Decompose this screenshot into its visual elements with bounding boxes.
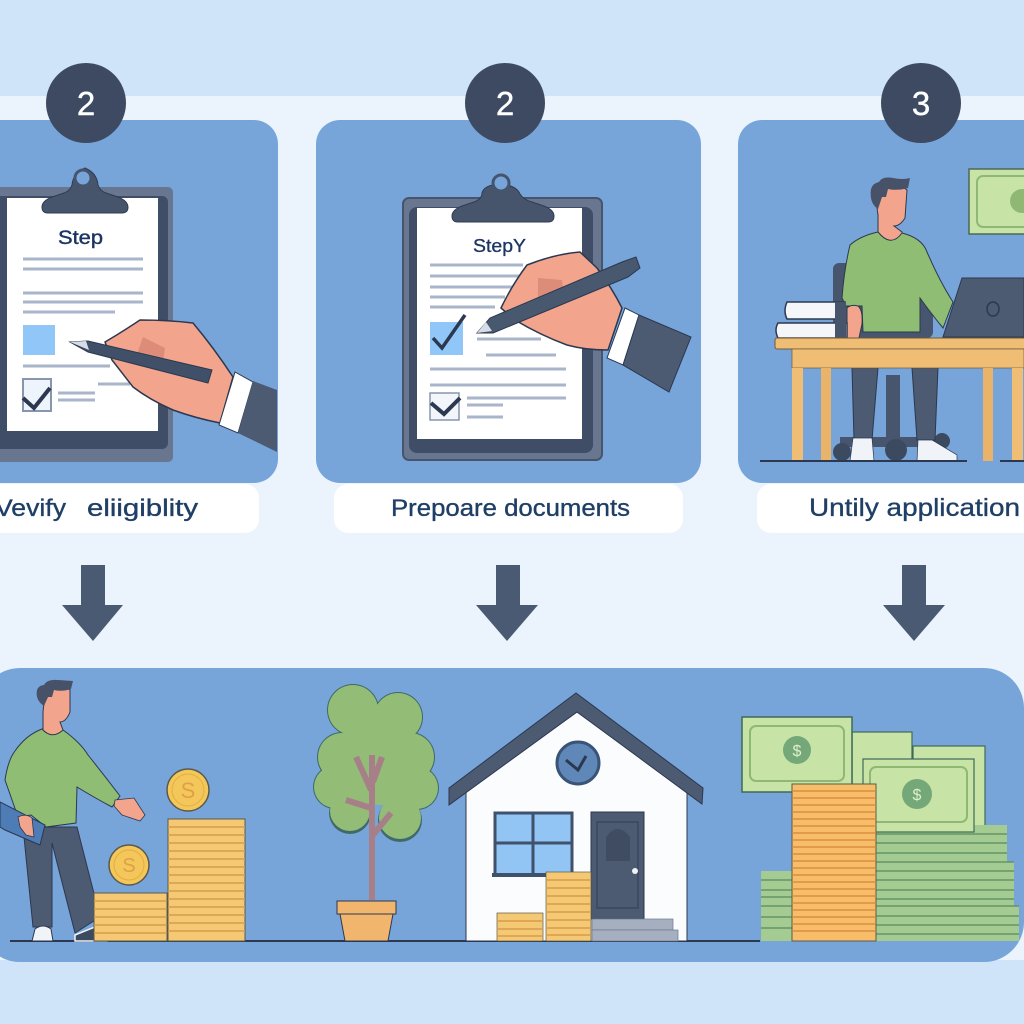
label: verify eligibility: eliigiblity <box>87 495 198 522</box>
panel: step 2 prepare documents <box>316 120 701 483</box>
label: application <box>757 484 1024 533</box>
label: prepare documents: Prepoare documents <box>391 495 630 522</box>
step badge 1: 2 <box>77 85 95 122</box>
coin stacks: S <box>122 855 136 877</box>
label: verify eligibility <box>0 484 259 533</box>
money pile <box>742 717 1019 941</box>
money pile: $ <box>793 743 802 760</box>
step badge 3: 3 <box>912 85 930 122</box>
coin stacks: S <box>181 778 195 803</box>
panel: outcomes <box>0 668 1024 962</box>
clipboard 1 <box>0 168 173 462</box>
coin stacks <box>94 769 245 941</box>
books <box>776 302 847 338</box>
arrow 3 <box>883 565 945 641</box>
clipboard 2: StepY <box>473 236 526 256</box>
banknote <box>969 169 1024 234</box>
desk <box>775 338 1024 461</box>
hand with pen 1 <box>70 320 277 452</box>
label: application: Untily application <box>809 494 1020 522</box>
hand with pen 2 <box>477 252 691 392</box>
laptop <box>943 278 1024 337</box>
panel: step 1 verify eligibility <box>0 120 278 483</box>
label: prepare documents <box>334 484 683 533</box>
step badge 2: 2 <box>496 85 514 122</box>
money pile: $ <box>913 787 922 804</box>
clipboard 1: Step <box>58 228 103 249</box>
step badge 3 <box>881 63 961 143</box>
person with coins <box>0 680 145 941</box>
clipboard 2 <box>403 175 602 460</box>
step badge 1 <box>46 63 126 143</box>
person at desk <box>833 178 957 461</box>
arrow 2 <box>476 565 538 641</box>
step badge 2 <box>465 63 545 143</box>
potted tree <box>313 684 439 941</box>
arrow 1 <box>62 565 123 641</box>
house <box>449 693 703 941</box>
panel: step 3 submit application <box>738 120 1024 483</box>
